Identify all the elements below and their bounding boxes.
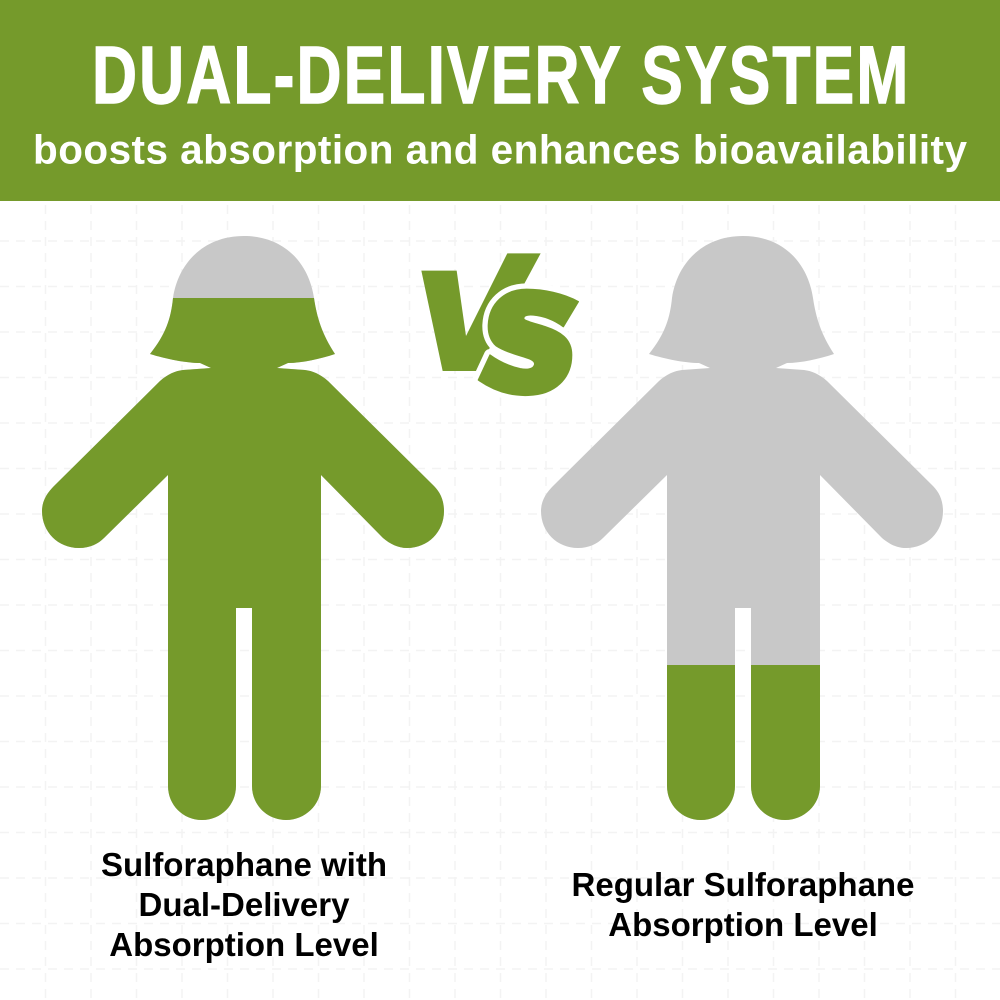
label: regular: Absorption Level xyxy=(608,906,878,943)
subtitle: boosts absorption and enhances bioavailability xyxy=(33,126,967,172)
label: regular xyxy=(572,866,914,943)
label: dual-delivery: Dual-Delivery xyxy=(139,886,350,923)
figure: regular absorption level xyxy=(541,236,943,820)
label: dual-delivery xyxy=(101,846,387,963)
label: dual-delivery: Absorption Level xyxy=(109,926,379,963)
figure: dual-delivery absorption level xyxy=(42,236,444,820)
label: dual-delivery: Sulforaphane with xyxy=(101,846,387,883)
icon: VS xyxy=(421,253,578,395)
header banner xyxy=(0,0,1000,201)
label: regular: Regular Sulforaphane xyxy=(572,866,914,903)
title: DUAL-DELIVERY SYSTEM xyxy=(92,30,908,121)
